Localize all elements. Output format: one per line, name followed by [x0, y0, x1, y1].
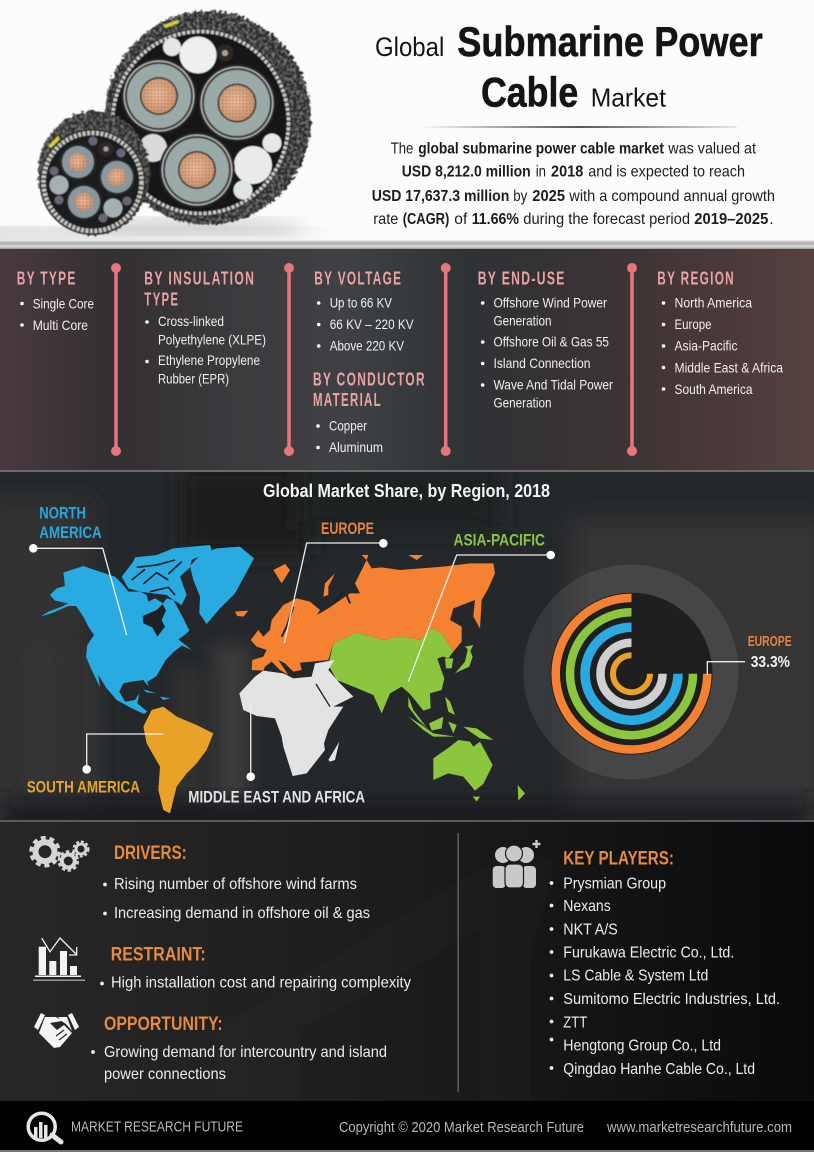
opportunity: OPPORTUNITY:	[104, 1014, 223, 1035]
large cable	[105, 11, 311, 225]
column: by insulation type: BY INSULATION	[144, 268, 255, 288]
column: by voltage: Up to 66 KV	[330, 294, 393, 310]
restraint	[100, 945, 411, 992]
key players: LS Cable & System Ltd	[563, 968, 708, 985]
column: by voltage: 66 KV – 220 KV	[330, 316, 414, 332]
column: by end-use	[478, 268, 613, 411]
key players	[550, 848, 780, 1078]
column: by voltage: Above 220 KV	[330, 338, 405, 354]
column: by region: Asia-Pacific	[674, 338, 738, 354]
panel: header	[0, 0, 814, 244]
key players: Sumitomo Electric Industries, Ltd.	[563, 991, 780, 1008]
text block: market summary: (CAGR)	[403, 211, 449, 228]
callout: asia-pacific	[408, 531, 555, 682]
column: by region: BY REGION	[657, 268, 735, 288]
text block: market summary: USD 8,212.0 million	[402, 164, 531, 181]
column: by region: South America	[674, 381, 753, 397]
callout: asia-pacific: ASIA-PACIFIC	[454, 531, 545, 550]
divider	[458, 833, 459, 1092]
column: by end-use: Generation	[494, 395, 552, 411]
text block: market summary: 2025	[532, 188, 565, 205]
key players: Hengtong Group Co., Ltd	[563, 1038, 721, 1055]
column: by conductor material: Copper	[329, 418, 367, 434]
column: by conductor material: BY CONDUCTOR	[313, 370, 426, 390]
website: www.marketresearchfuture.com	[606, 1119, 792, 1136]
column: by insulation type: Polyethylene (XLPE)	[158, 331, 266, 347]
footer	[0, 1101, 814, 1152]
column: by type: Single Core	[33, 295, 94, 311]
column: by end-use: BY END-USE	[478, 268, 566, 288]
key players: ZTT	[563, 1014, 587, 1031]
region: asia-pacific	[328, 628, 525, 802]
callout: europe: EUROPE	[321, 519, 374, 538]
region: europe	[235, 555, 495, 675]
callout: south america	[27, 734, 163, 797]
title: Global	[375, 32, 444, 62]
panel: market segmentation	[0, 249, 814, 472]
title	[375, 18, 763, 116]
drivers: Increasing demand in offshore oil & gas	[114, 905, 370, 922]
restraint: RESTRAINT:	[111, 945, 206, 966]
key players: Furukawa Electric Co., Ltd.	[563, 944, 734, 961]
copyright: Copyright © 2020 Market Research Future	[339, 1119, 584, 1136]
title: Submarine Power	[457, 18, 763, 65]
icon: people	[493, 840, 540, 888]
text block: market summary: .	[769, 211, 774, 228]
text block: market summary: USD 17,637.3 million	[372, 188, 509, 205]
column: by region	[657, 268, 783, 397]
title: Market	[591, 83, 667, 113]
column: by insulation type: Rubber (EPR)	[158, 370, 229, 386]
key players: Qingdao Hanhe Cable Co., Ltd	[563, 1061, 755, 1078]
column: by end-use: Generation	[494, 312, 552, 328]
opportunity	[91, 1014, 387, 1083]
column: by type	[17, 268, 94, 333]
callout: middle east and africa	[188, 703, 365, 806]
callout: south america: SOUTH AMERICA	[27, 778, 140, 797]
text block: market summary: rate	[373, 211, 398, 228]
title: Cable	[481, 69, 578, 116]
column: by type: BY TYPE	[17, 268, 77, 288]
callout: north america: NORTH	[39, 503, 86, 522]
key players: Prysmian Group	[563, 875, 666, 892]
column: by insulation type: Cross-linked	[158, 313, 224, 329]
callout: europe share: EUROPE	[748, 634, 792, 650]
text block: market summary: during the forecast period	[523, 211, 690, 228]
column: by insulation type	[144, 268, 266, 386]
callout: north america	[29, 503, 127, 635]
drivers: Rising number of offshore wind farms	[114, 876, 357, 893]
callout: europe share	[707, 634, 792, 675]
column: by region: Middle East & Africa	[674, 359, 783, 375]
callout: north america: AMERICA	[39, 523, 102, 542]
text block: market summary: with a compound annual growth	[568, 188, 775, 205]
restraint: High installation cost and repairing complexity	[111, 975, 411, 992]
icon: logo	[28, 1113, 61, 1142]
chart: radial bars	[524, 564, 792, 780]
callout: europe	[284, 519, 388, 643]
text block: market summary: by	[513, 188, 527, 205]
region: north america	[41, 545, 254, 714]
region: south america	[143, 707, 213, 813]
text block: market summary: of	[454, 211, 468, 228]
callout: middle east and africa: MIDDLE EAST AND AFRICA	[188, 787, 365, 806]
column: by insulation type: TYPE	[144, 290, 179, 310]
drivers	[103, 843, 370, 922]
column: by region: North America	[674, 294, 752, 310]
world map	[41, 545, 525, 813]
panel: market share map	[0, 460, 814, 830]
column: by voltage: BY VOLTAGE	[314, 268, 402, 288]
region: middle east and africa	[239, 660, 353, 776]
text block: market summary: in	[536, 164, 546, 181]
key players: NKT A/S	[563, 922, 618, 939]
column: by type: Multi Core	[33, 317, 88, 333]
icon: handshake	[34, 1013, 79, 1048]
key players: KEY PLAYERS:	[563, 848, 674, 869]
icon: gears	[31, 838, 88, 870]
panel: market dynamics	[0, 822, 814, 1101]
text block: market summary: 2019–2025	[694, 211, 768, 228]
column dividers	[112, 264, 636, 456]
column: by conductor material	[313, 370, 426, 455]
image: submarine cable cross sections	[38, 11, 311, 235]
column: by voltage	[314, 268, 414, 354]
text block: market summary: 2018	[551, 164, 583, 181]
small cable	[38, 111, 150, 235]
text block: market summary: 11.66%	[472, 211, 519, 228]
text block: market summary: The	[391, 140, 413, 157]
opportunity: power connections	[104, 1066, 226, 1083]
chart heading: Global Market Share, by Region, 2018	[263, 481, 550, 501]
text block: market summary	[372, 140, 775, 228]
callout: europe share: 33.3%	[751, 654, 790, 671]
key players: Nexans	[563, 898, 611, 915]
text block: market summary: and is expected to reach	[588, 164, 745, 181]
column: by insulation type: Ethylene Propylene	[158, 352, 260, 368]
column: by end-use: Offshore Oil & Gas 55	[494, 334, 609, 350]
column: by end-use: Island Connection	[494, 355, 590, 371]
text block: market summary: global submarine power cable market	[418, 140, 665, 157]
column: by conductor material: Aluminum	[329, 439, 383, 455]
column: by end-use: Offshore Wind Power	[494, 294, 607, 310]
brand name: MARKET RESEARCH FUTURE	[71, 1119, 243, 1136]
text block: market summary: was valued at	[667, 140, 756, 157]
column: by end-use: Wave And Tidal Power	[494, 377, 613, 393]
icon: declining bar chart	[33, 938, 85, 981]
opportunity: Growing demand for intercountry and island	[104, 1044, 387, 1061]
drivers: DRIVERS:	[114, 843, 187, 864]
column: by conductor material: MATERIAL	[313, 390, 382, 410]
column: by region: Europe	[674, 316, 712, 332]
